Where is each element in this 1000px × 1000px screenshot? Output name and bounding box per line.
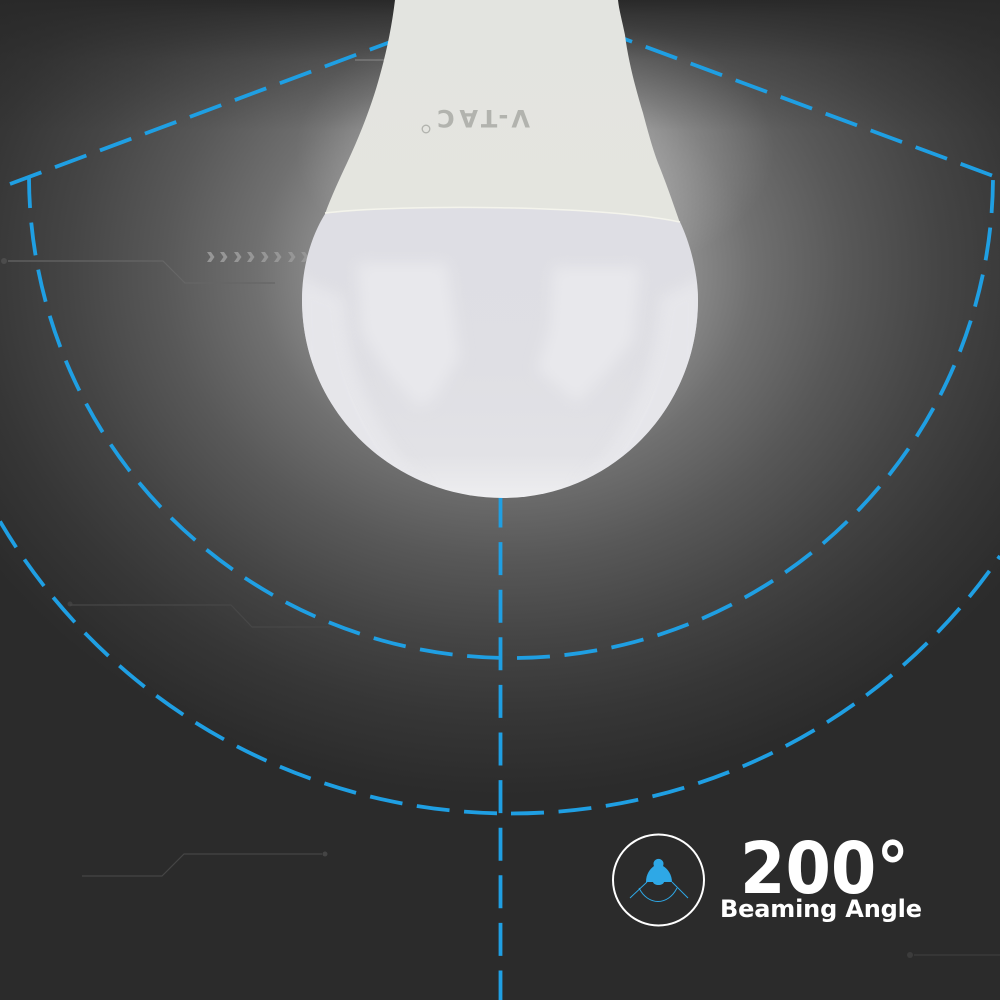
left rim light xyxy=(302,278,424,482)
decorative circuit line: lower left xyxy=(82,852,328,876)
logo on the bulb: V-TAC xyxy=(437,104,530,132)
icon: beaming angle xyxy=(613,834,704,926)
value: 200 degrees: 200° xyxy=(740,828,909,911)
decorative circuit line: upper left xyxy=(1,258,275,283)
globe shading xyxy=(302,269,698,482)
chevron arrows xyxy=(207,252,308,262)
right rim light xyxy=(582,280,698,481)
label: Beaming Angle: Beaming Angle xyxy=(720,895,922,923)
bulb neck xyxy=(325,0,680,223)
registered mark xyxy=(422,125,430,133)
decorative circuit line: behind neck xyxy=(355,59,386,61)
left highlight on globe xyxy=(364,269,452,392)
bulb globe xyxy=(302,208,698,498)
decorative circuit line: lower right xyxy=(907,952,1000,958)
right highlight on globe xyxy=(548,274,632,387)
light bulb xyxy=(296,0,704,500)
seam between neck and globe xyxy=(325,207,680,222)
decorative circuit line: middle left xyxy=(68,602,330,627)
